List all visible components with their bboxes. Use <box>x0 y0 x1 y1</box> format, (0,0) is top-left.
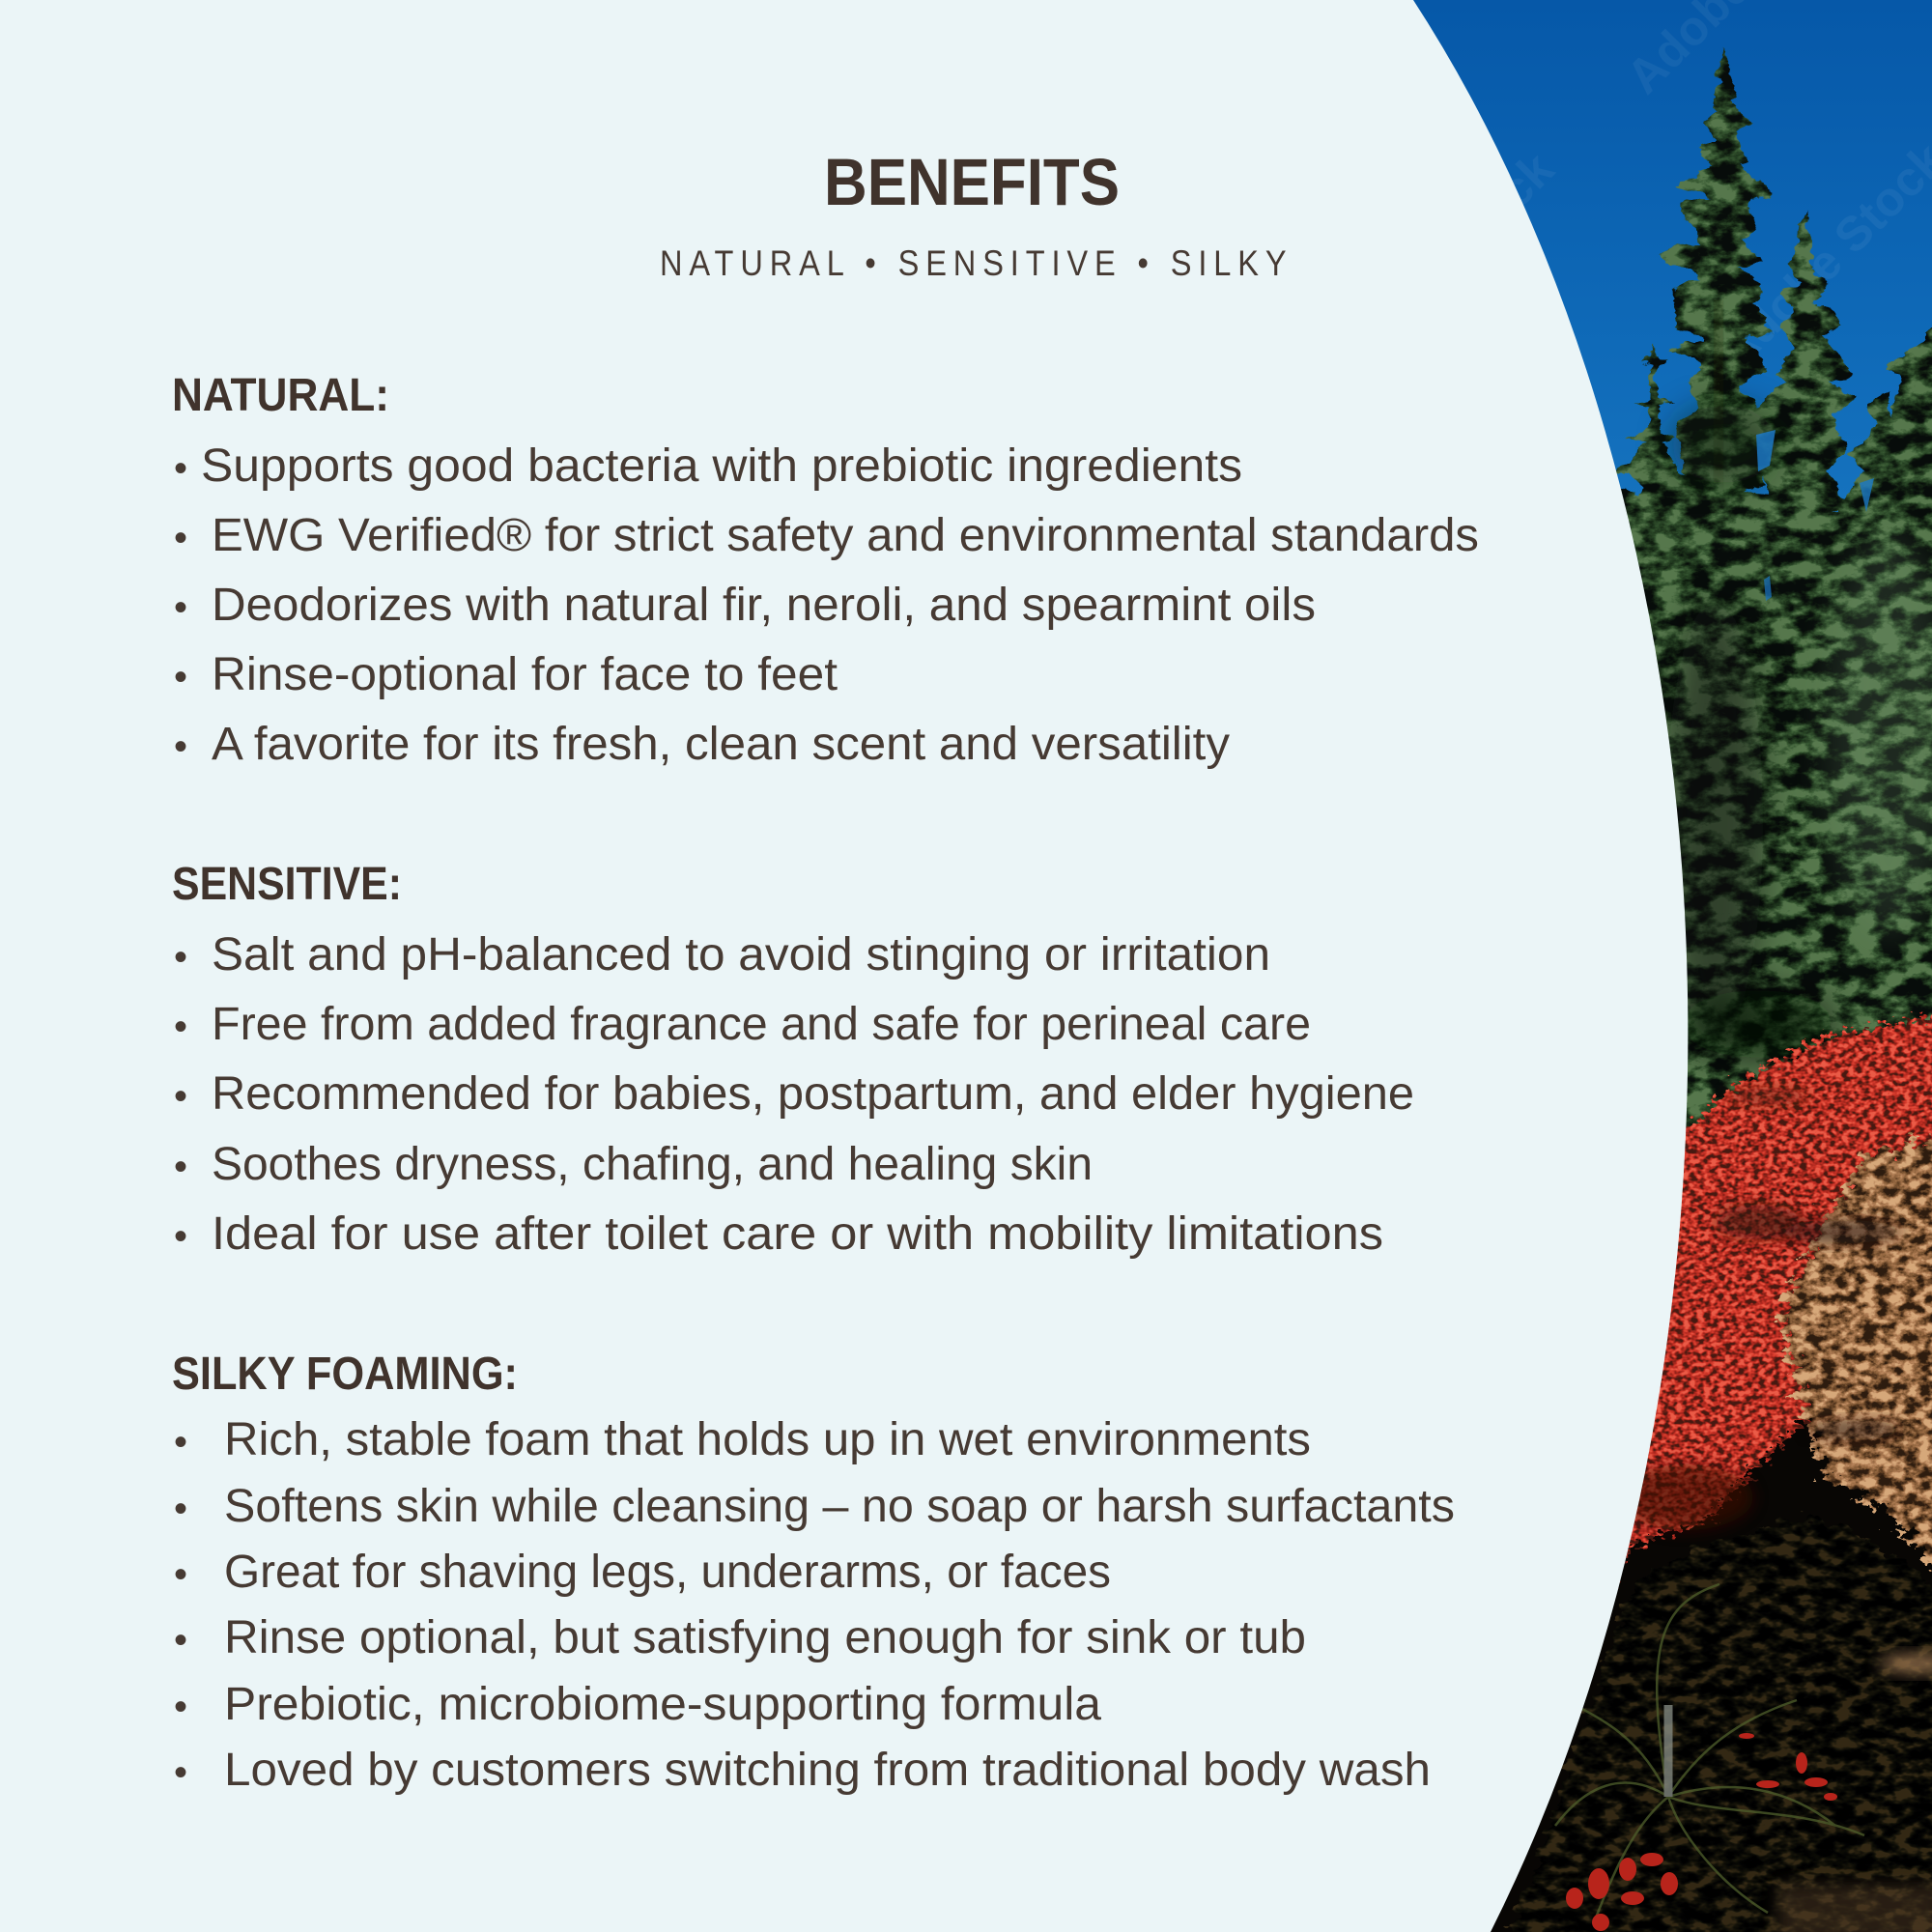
section: natural <box>172 370 1479 770</box>
silky foaming bullets: • <box>174 1488 187 1530</box>
shaded ground <box>1507 1517 1932 1932</box>
natural bullets: Rinse-optional for face to feet <box>212 649 838 700</box>
section: silky foaming <box>172 1349 1455 1796</box>
tree shading <box>1666 299 1932 1058</box>
sunlit trail patches <box>1777 1654 1932 1932</box>
sensitive bullets: Recommended for babies, postpartum, and elder hygiene <box>212 1068 1414 1120</box>
silky foaming bullets: Great for shaving legs, underarms, or faces <box>224 1547 1111 1598</box>
sensitive bullets: Free from added fragrance and safe for perineal care <box>212 999 1311 1050</box>
sensitive bullets: Soothes dryness, chafing, and healing skin <box>212 1139 1093 1190</box>
sensitive bullets: Salt and pH-balanced to avoid stinging or irritation <box>212 929 1270 980</box>
section: sensitive <box>172 859 1414 1260</box>
title: BENEFITS <box>824 145 1120 219</box>
silky foaming bullets <box>174 1414 1455 1796</box>
silky foaming bullets: Loved by customers switching from traditional body wash <box>224 1745 1431 1796</box>
ground shadow base <box>1449 1111 1932 1932</box>
silky foaming bullets: • <box>174 1686 187 1728</box>
heading: sensitive: SENSITIVE: <box>172 859 402 910</box>
photo: mountain trail with fir trees <box>1352 0 1932 1932</box>
natural bullets: • <box>174 656 187 698</box>
sensitive bullets <box>174 929 1414 1260</box>
natural bullets: EWG Verified® for strict safety and environmental standards <box>212 510 1479 561</box>
natural bullets: Supports good bacteria with prebiotic ingredients <box>201 440 1242 492</box>
sensitive bullets: Ideal for use after toilet care or with mobility limitations <box>212 1208 1383 1260</box>
red shrubs <box>1584 1014 1932 1642</box>
natural bullets: A favorite for its fresh, clean scent and versatility <box>212 719 1230 770</box>
silky foaming bullets: • <box>174 1751 187 1794</box>
natural bullets: • <box>174 725 187 768</box>
natural bullets <box>174 440 1479 770</box>
natural bullets: • <box>174 447 187 490</box>
fir trees <box>1594 43 1932 1159</box>
silky foaming bullets: • <box>174 1553 187 1596</box>
heading: natural: NATURAL: <box>172 370 389 421</box>
sensitive bullets: • <box>174 1215 187 1258</box>
heading: silky foaming: SILKY FOAMING: <box>172 1349 518 1400</box>
silky foaming bullets: • <box>174 1421 187 1463</box>
grass <box>1555 1584 1864 1922</box>
silky foaming bullets: Rinse optional, but satisfying enough for sink or tub <box>224 1612 1306 1663</box>
watermark text: Stock <box>1433 142 1564 273</box>
trail shadows <box>1777 1220 1903 1439</box>
silky foaming bullets: • <box>174 1619 187 1662</box>
shaded patches on shrubs <box>1618 1088 1811 1530</box>
natural bullets: • <box>174 586 187 629</box>
silky foaming bullets: Prebiotic, microbiome-supporting formula <box>224 1679 1101 1730</box>
sensitive bullets: • <box>174 1146 187 1188</box>
sensitive bullets: • <box>174 936 187 979</box>
watermark text <box>1433 0 1932 380</box>
sensitive bullets: • <box>174 1006 187 1048</box>
silky foaming bullets: Softens skin while cleansing – no soap or harsh surfactants <box>224 1481 1455 1532</box>
dirt trail <box>1780 1135 1932 1584</box>
natural bullets: • <box>174 517 187 559</box>
natural bullets: Deodorizes with natural fir, neroli, and spearmint oils <box>212 580 1316 631</box>
sensitive bullets: • <box>174 1075 187 1118</box>
subtitle: NATURAL • SENSITIVE • SILKY <box>660 243 1287 283</box>
sky <box>1352 0 1932 773</box>
red leaves <box>1566 1733 1837 1931</box>
silky foaming bullets: Rich, stable foam that holds up in wet environments <box>224 1414 1311 1465</box>
